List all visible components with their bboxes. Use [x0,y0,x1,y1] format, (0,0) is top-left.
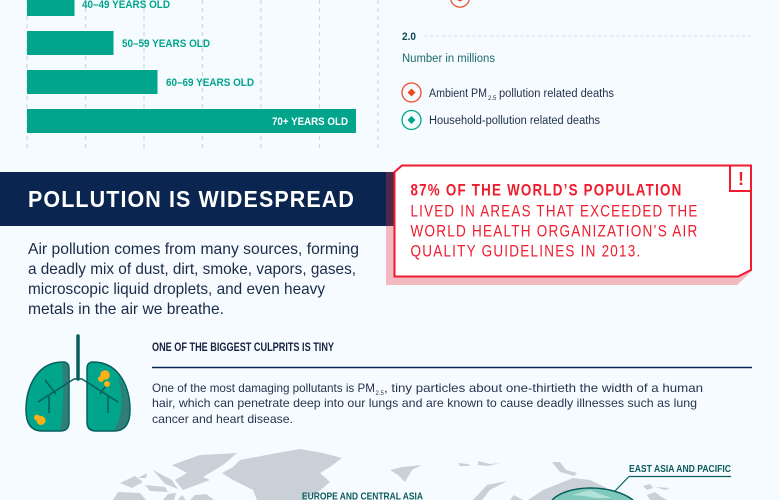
bar chart: deaths by age group [27,0,356,133]
intro text block: a deadly mix of dust, dirt, smoke, vapors, gases, [28,261,356,278]
icon: exclamation mark [730,166,751,191]
callout: 87 percent statistic [386,166,751,285]
bar: 60-69 years old [27,70,254,94]
intro text block: metals in the air we breathe. [28,301,224,318]
intro text block: microscopic liquid droplets, and even heavy [28,281,325,298]
legend item: ambient PM2.5 deaths: pollution related deaths [499,88,614,100]
bar: 60-69 years old: 60–69 YEARS OLD [166,77,254,89]
axis label: 2.0: 2.0 [402,31,416,43]
map bubble: East Asia and Pacific: EAST ASIA AND PACIFIC [629,464,731,475]
intro text block: Air pollution comes from many sources, forming [28,241,359,258]
icon: lungs [26,336,130,431]
line chart fragment: ambient data point marker [451,0,469,7]
callout text: QUALITY GUIDELINES IN 2013. [410,242,642,260]
bar: 70+ years old [27,109,356,133]
legend item: ambient PM2.5 deaths: Ambient PM [429,88,487,100]
legend [402,83,614,130]
intro text block [28,241,359,318]
bar: 50-59 years old: 50–59 YEARS OLD [122,38,210,50]
paragraph: PM2.5 explanation: 2.5 [376,391,385,397]
heading banner: pollution is widespread: POLLUTION IS WIDESPREAD [28,186,355,212]
subheading: one of the biggest culprits is tiny: ONE OF THE BIGGEST CULPRITS IS TINY [152,342,334,354]
callout text: WORLD HEALTH ORGANIZATION’S AIR [410,222,698,240]
axis unit note: Number in millions [402,53,495,65]
paragraph: PM2.5 explanation: hair, which can penetrate deep into our lungs and are known to cause deadly illnesses such as lung [152,396,697,410]
paragraph: PM2.5 explanation: One of the most damaging pollutants is PM [152,381,375,395]
paragraph: PM2.5 explanation [152,381,703,426]
bar: 70+ years old: 70+ YEARS OLD [272,116,348,128]
icon: exclamation mark: ! [738,169,744,189]
legend item: ambient PM2.5 deaths: 2.5 [488,96,497,102]
legend item: ambient PM2.5 deaths [402,83,614,102]
callout text [410,182,698,260]
legend item: household pollution deaths [402,110,600,130]
heading banner: pollution is widespread [0,172,395,226]
map bubble: East Asia and Pacific [552,464,731,500]
callout text: LIVED IN AREAS THAT EXCEEDED THE [410,202,698,220]
bar: 40-49 years old [27,0,170,16]
callout text: 87% OF THE WORLD’S POPULATION [410,182,682,200]
legend item: household pollution deaths: Household-pollution related deaths [429,115,600,127]
bar: 50-59 years old [27,31,210,55]
paragraph: PM2.5 explanation: , tiny particles about one-thirtieth the width of a human [384,381,703,395]
paragraph: PM2.5 explanation: cancer and heart disease. [152,412,293,426]
world map fragment [113,449,670,500]
